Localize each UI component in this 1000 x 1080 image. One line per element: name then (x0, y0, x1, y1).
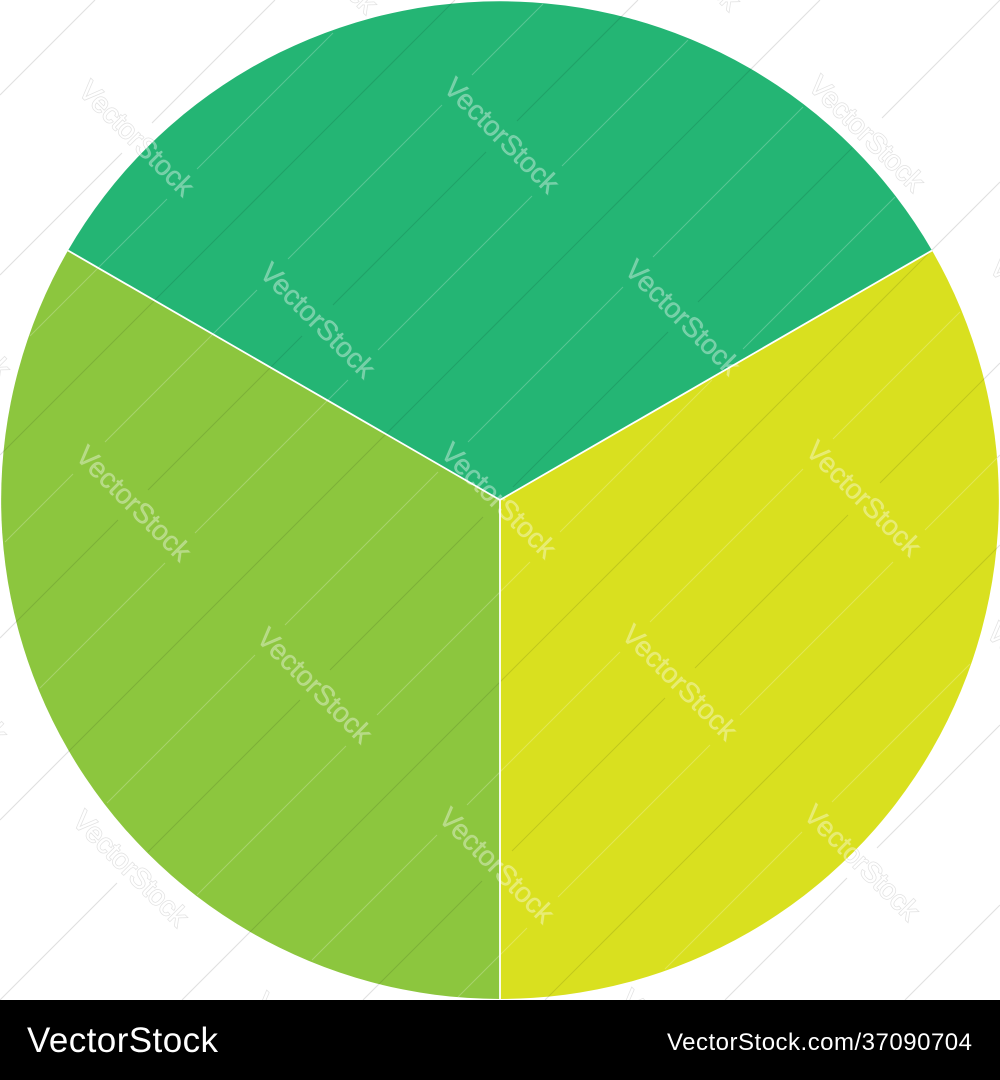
watermark text on white background: VectorStock (798, 799, 926, 927)
footer brand name: VectorStock (27, 1021, 218, 1060)
watermark text over pie: VectorStock (251, 622, 379, 750)
watermark text over pie: VectorStock (798, 799, 926, 927)
watermark text over pie: VectorStock (800, 435, 928, 563)
watermark text over pie: VectorStock (438, 72, 566, 200)
watermark text over pie: VectorStock (435, 437, 563, 565)
watermark text over pie (67, 70, 931, 933)
watermark text on white background: VectorStock (67, 805, 195, 933)
segment: lower left lime (1, 250, 500, 999)
segment: top green (68, 1, 932, 500)
watermark text on white background: VectorStock (73, 75, 201, 203)
footer image reference: VectorStock.com/37090704 (667, 1029, 972, 1056)
footer bar (0, 1000, 1000, 1080)
segment: lower right yellow (500, 250, 999, 999)
watermark text over pie: VectorStock (70, 440, 198, 568)
watermark text over pie: VectorStock (67, 805, 195, 933)
watermark text on white background: VectorStock (803, 70, 931, 198)
watermark text over pie: VectorStock (803, 70, 931, 198)
watermark text over pie: VectorStock (433, 802, 561, 930)
watermark text over pie: VectorStock (254, 257, 382, 385)
watermark text over pie: VectorStock (73, 75, 201, 203)
pie segment dividers (68, 250, 932, 999)
watermark text over pie: VectorStock (619, 254, 747, 382)
watermark text over pie: VectorStock (616, 619, 744, 747)
